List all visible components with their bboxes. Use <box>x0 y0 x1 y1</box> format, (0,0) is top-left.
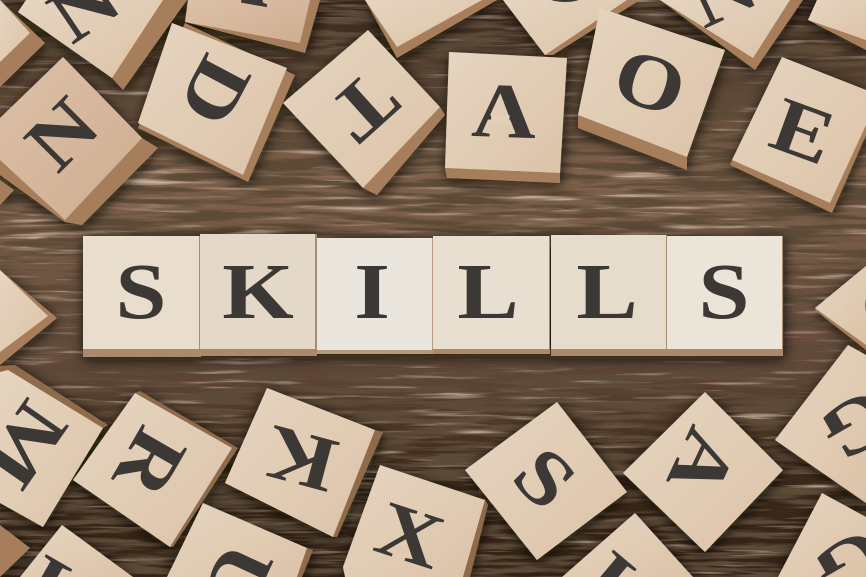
block: O <box>578 8 725 170</box>
letter block L <box>551 235 667 356</box>
block: T: T <box>313 55 415 159</box>
block: D: D <box>161 42 268 140</box>
block: S: S <box>497 430 593 526</box>
letter block S: S <box>698 247 750 336</box>
block: K <box>225 388 383 537</box>
block: A: A <box>470 67 538 156</box>
block: N: N <box>9 81 116 188</box>
block: A <box>623 392 783 552</box>
block: E <box>730 57 866 213</box>
block: T <box>283 30 445 195</box>
block: E: E <box>760 81 846 182</box>
letter block L: L <box>576 247 638 336</box>
letter block S <box>83 236 201 357</box>
block: O: O <box>603 31 696 134</box>
block: R <box>73 391 238 547</box>
letter block I <box>317 238 433 354</box>
word: SKILLS <box>83 234 783 357</box>
side blocks left and right <box>0 180 866 365</box>
letter block S: S <box>115 247 167 336</box>
block: K: K <box>256 408 346 509</box>
block: M <box>0 365 108 527</box>
bottom row of cropped blocks <box>0 493 866 577</box>
block: S <box>465 402 627 560</box>
top row of cropped blocks <box>0 0 866 90</box>
block: A <box>445 52 567 183</box>
letter block L <box>433 236 550 354</box>
block: U <box>167 503 313 577</box>
letter block K <box>200 234 317 356</box>
block: X <box>343 465 488 577</box>
block: D <box>138 23 295 182</box>
letter block K: K <box>222 247 294 336</box>
block: A: A <box>650 415 755 511</box>
letter block L: L <box>457 247 519 336</box>
letter block S <box>667 236 783 356</box>
letter block I: I <box>354 247 390 336</box>
block: N <box>0 57 158 225</box>
block: G <box>775 345 866 503</box>
block: R: R <box>95 413 203 514</box>
